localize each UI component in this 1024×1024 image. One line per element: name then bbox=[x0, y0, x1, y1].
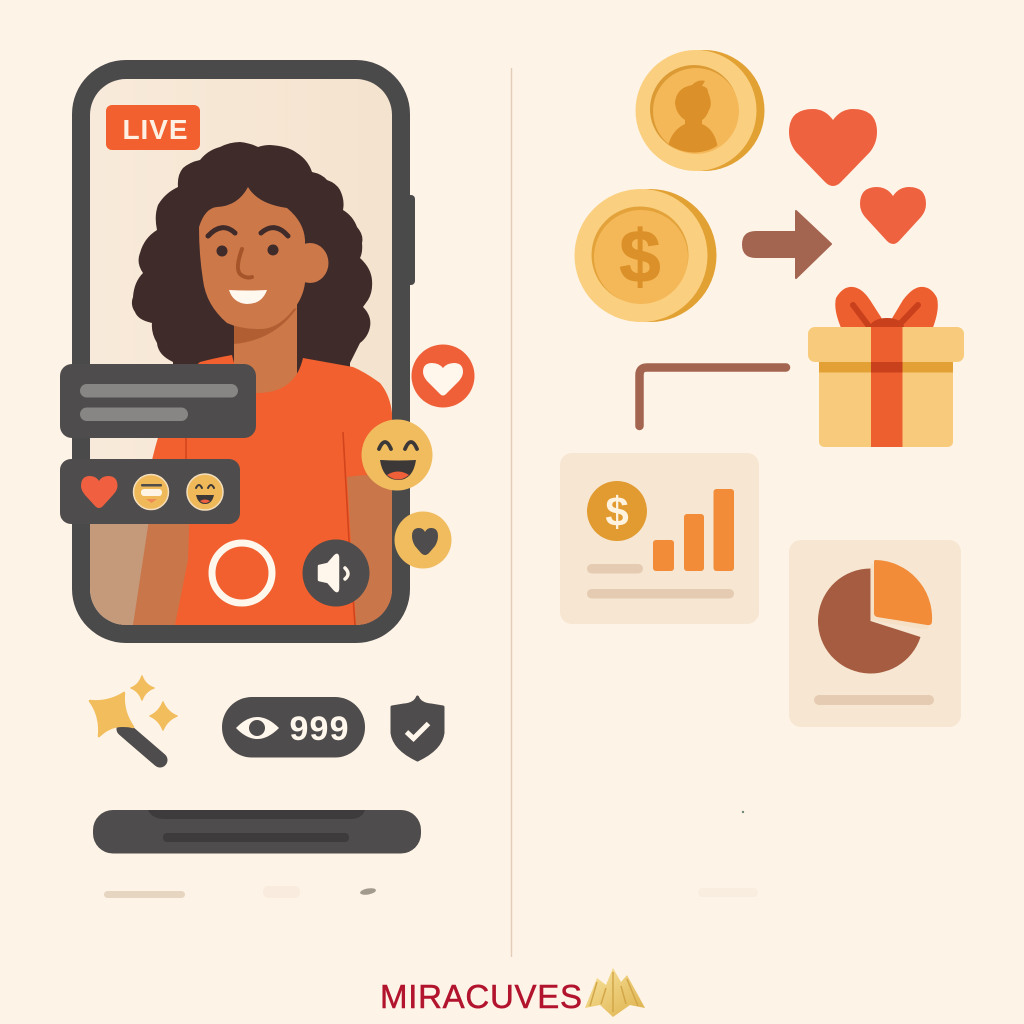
floating laughing emoji bbox=[362, 420, 432, 490]
dollar badge: $ bbox=[605, 488, 629, 535]
dollar sign: $ bbox=[619, 215, 661, 298]
dollar badge bbox=[587, 481, 647, 541]
bar chart bbox=[653, 489, 734, 571]
reaction emoji two bbox=[187, 474, 223, 510]
portrait silhouette bbox=[667, 80, 718, 156]
gift box bbox=[808, 287, 964, 447]
hair bbox=[132, 142, 372, 385]
gold coin with portrait bbox=[636, 50, 764, 171]
reaction heart bbox=[81, 476, 118, 508]
panel: phone live stream bbox=[60, 60, 415, 643]
phone screen bbox=[90, 79, 392, 625]
arrow bbox=[743, 211, 831, 278]
neck bbox=[234, 304, 297, 393]
speaker button bbox=[302, 540, 370, 606]
small heart bbox=[860, 187, 926, 244]
bottom dark bar bbox=[93, 810, 421, 854]
logo mountains bbox=[585, 968, 645, 1017]
gold coin with dollar bbox=[574, 189, 716, 322]
comment box bbox=[60, 364, 256, 438]
LIVE badge bbox=[106, 105, 200, 150]
gift body bbox=[819, 355, 953, 447]
eyebrows bbox=[208, 228, 288, 236]
bow bbox=[835, 287, 938, 336]
LIVE badge: LIVE bbox=[122, 114, 188, 145]
viewer count pill bbox=[222, 697, 365, 758]
shirt bbox=[120, 355, 392, 625]
icon: shield check bbox=[392, 697, 443, 760]
logo wordmark: MIRACUVES bbox=[380, 978, 582, 1015]
ear bbox=[305, 243, 328, 283]
logo bbox=[380, 968, 645, 1017]
large heart bbox=[789, 109, 877, 186]
connector line bbox=[640, 368, 786, 426]
record button bbox=[212, 543, 272, 603]
left arm light bbox=[90, 524, 148, 625]
streamer portrait bbox=[90, 142, 392, 625]
icon: magic wand bbox=[90, 676, 177, 760]
panel: pie chart card bbox=[789, 540, 961, 727]
pie chart bbox=[818, 560, 932, 674]
floating yellow heart badge bbox=[394, 512, 452, 568]
nose bbox=[238, 249, 252, 278]
icon: eye bbox=[236, 717, 279, 739]
reaction box bbox=[60, 459, 240, 524]
chin shadow bbox=[234, 308, 297, 344]
faded caption marks right bbox=[698, 811, 758, 897]
faded caption marks bbox=[104, 886, 376, 898]
shirt creases bbox=[186, 432, 355, 625]
card text line bbox=[814, 695, 934, 705]
smile bbox=[229, 290, 267, 304]
floating heart badge bbox=[412, 344, 474, 408]
eyes bbox=[216, 246, 228, 256]
phone side button bbox=[405, 195, 415, 285]
right arm bbox=[347, 475, 392, 625]
reaction emoji one bbox=[134, 474, 168, 510]
phone body bbox=[72, 60, 410, 643]
face bbox=[199, 187, 305, 329]
card text lines bbox=[587, 564, 734, 598]
panel: revenue card bbox=[560, 453, 759, 624]
left arm bbox=[133, 524, 190, 625]
gift band bbox=[819, 362, 953, 372]
gift ribbon bbox=[871, 327, 902, 447]
viewer count: 999 bbox=[290, 710, 348, 748]
gift lid bbox=[808, 327, 964, 362]
